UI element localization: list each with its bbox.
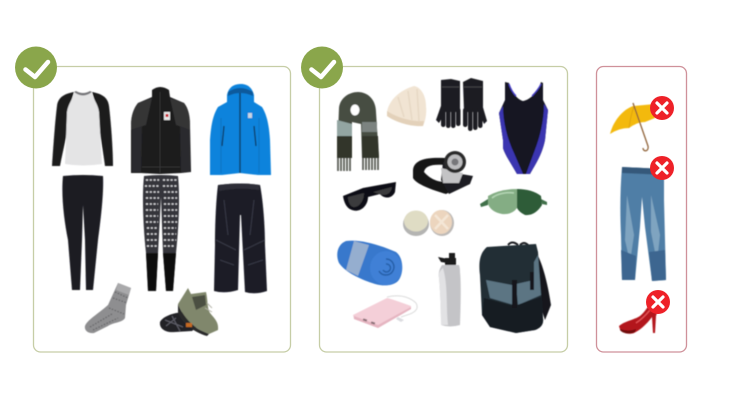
icon: check badge accessories xyxy=(301,46,343,88)
item: rolled blue towel xyxy=(337,241,402,285)
item: sleep mask xyxy=(480,189,547,215)
item: plaid scarf xyxy=(337,92,379,171)
icon: cross badge heel xyxy=(646,290,670,314)
panel: clothing to bring xyxy=(34,66,290,352)
icon: cross badge umbrella xyxy=(650,96,674,120)
item: backpack xyxy=(479,242,551,333)
item: boots with crampons xyxy=(160,288,218,336)
item: pink power bank xyxy=(353,296,417,328)
item: base layer shirt xyxy=(52,91,113,166)
item: lip balm tins xyxy=(403,210,454,236)
item: black leggings xyxy=(62,175,103,290)
item: water bottle xyxy=(438,253,461,326)
icon: check badge clothing xyxy=(15,46,57,88)
item: headlamp xyxy=(413,151,473,194)
item: snow pants xyxy=(214,184,267,293)
item: red high heel xyxy=(619,304,658,334)
item: blue shell jacket xyxy=(210,84,271,175)
item: fleece jacket xyxy=(131,87,191,174)
panel: accessories to bring xyxy=(320,66,568,352)
item: blue jeans xyxy=(620,167,666,281)
item: swimsuit xyxy=(499,82,548,174)
item: wool sock xyxy=(85,283,131,333)
item: sunglasses xyxy=(343,182,396,211)
item: yellow umbrella xyxy=(610,103,655,151)
item: knit beanie xyxy=(387,86,426,126)
item: patterned leggings xyxy=(143,175,179,291)
panel: items to avoid xyxy=(596,66,686,352)
item: winter gloves xyxy=(436,78,487,131)
icon: cross badge jeans xyxy=(650,156,674,180)
